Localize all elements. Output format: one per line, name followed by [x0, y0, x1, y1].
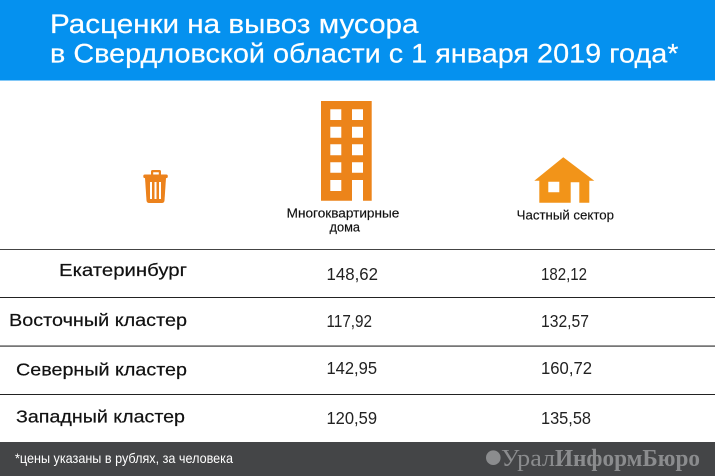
- row: Ekaterinburg: 148,62: [326, 264, 378, 284]
- footnote: *цены указаны в рублях, за человека: [15, 450, 233, 466]
- row: Western cluster: Западный кластер: [16, 406, 185, 426]
- title banner: в Свердловской области с 1 января 2019 года*: [50, 38, 678, 68]
- row: Eastern cluster: [9, 310, 589, 331]
- table rows: [0, 249, 715, 428]
- icon: apartment building: [321, 101, 372, 201]
- title banner: Расценки на вывоз мусора: [50, 9, 419, 39]
- row: Western cluster: [16, 406, 591, 428]
- title banner: [0, 0, 715, 80]
- logo: UralInformBuro: [486, 446, 700, 472]
- row: Eastern cluster: 117,92: [326, 311, 372, 331]
- column heading: apartment buildings: [287, 207, 399, 235]
- column heading: private sector: Частный сектор: [517, 208, 614, 222]
- icon: house: [534, 157, 594, 203]
- row: Eastern cluster: 132,57: [541, 311, 589, 331]
- logo: UralInformBuro: ИнформБюро: [555, 446, 700, 472]
- column heading: apartment buildings: дома: [330, 221, 360, 235]
- footer bar: [0, 442, 715, 476]
- logo: UralInformBuro: Урал: [501, 446, 555, 472]
- row: Ekaterinburg: Екатеринбург: [59, 260, 187, 280]
- row: Northern cluster: Северный кластер: [16, 360, 187, 380]
- row: Northern cluster: [16, 358, 592, 380]
- column heading: apartment buildings: Многоквартирные: [287, 207, 399, 221]
- row: Western cluster: 120,59: [326, 408, 377, 428]
- icon: trash can: [143, 170, 168, 203]
- row: Ekaterinburg: [59, 260, 587, 284]
- row: Northern cluster: 160,72: [541, 358, 592, 378]
- row: Western cluster: 135,58: [541, 408, 591, 428]
- row: Ekaterinburg: 182,12: [541, 264, 587, 284]
- row: Eastern cluster: Восточный кластер: [9, 310, 187, 330]
- row: Northern cluster: 142,95: [326, 358, 377, 378]
